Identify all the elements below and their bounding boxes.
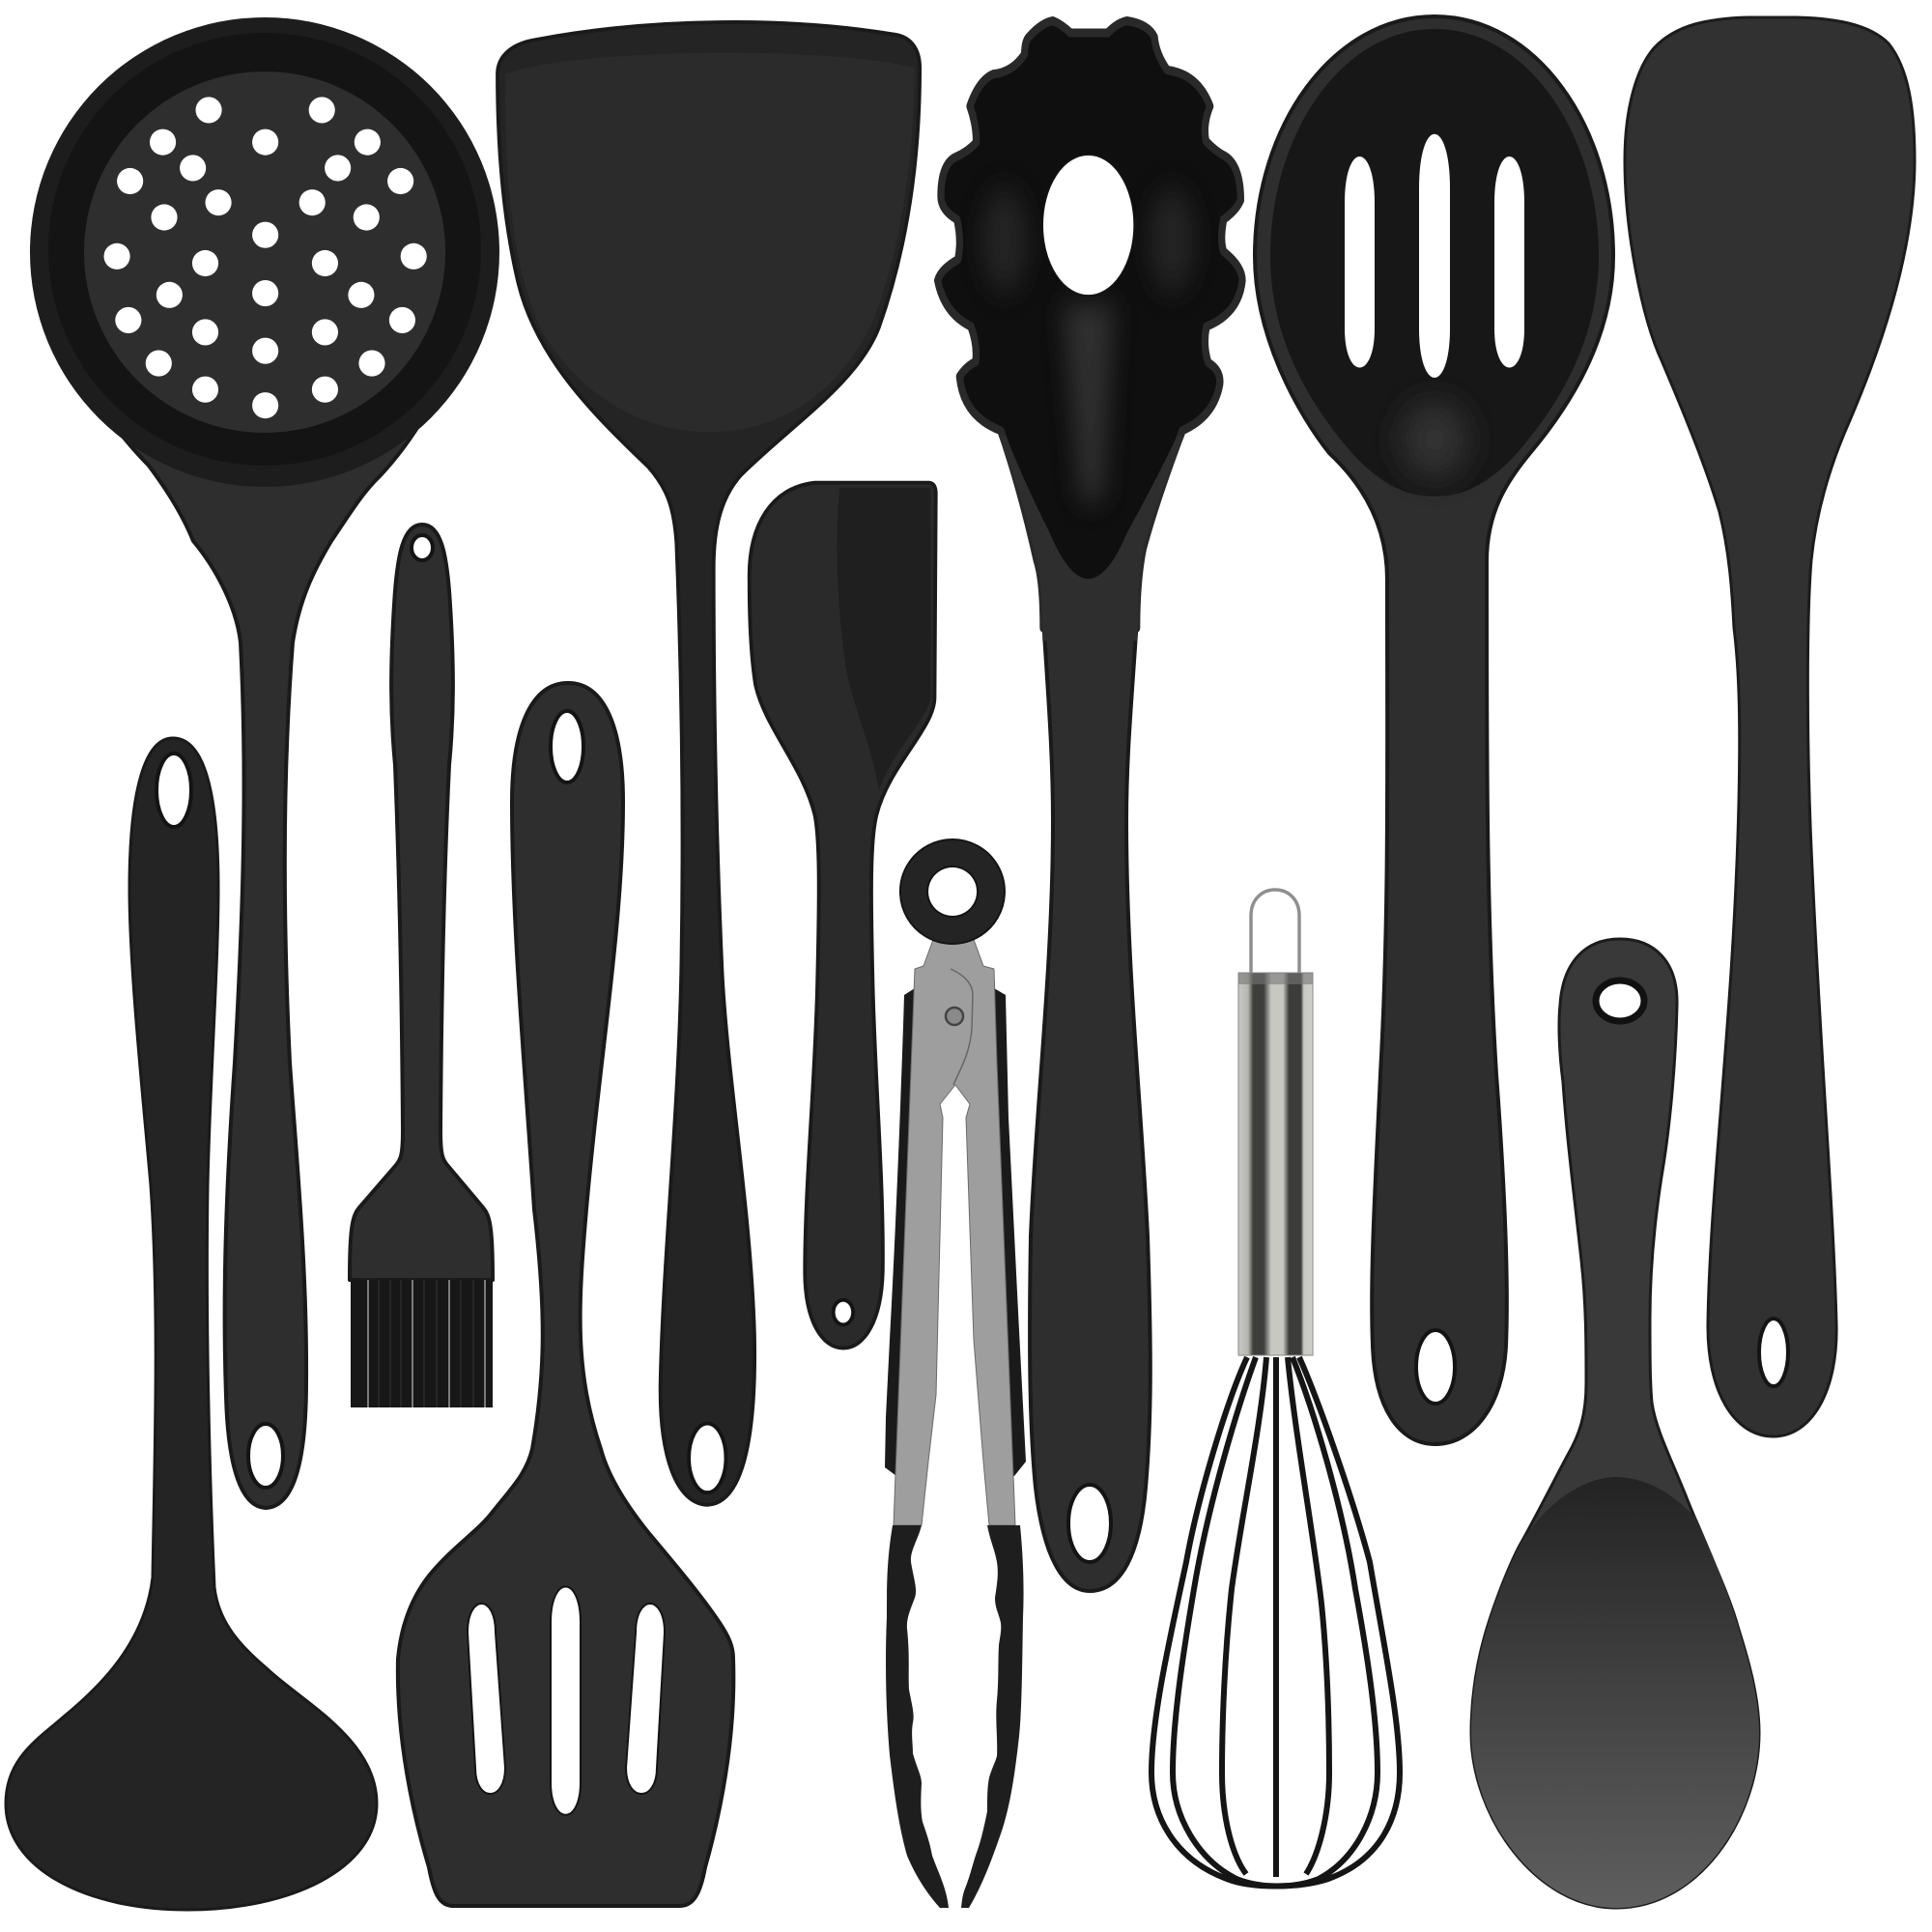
pasta server bottom hole — [1068, 1485, 1111, 1562]
slotted turner — [398, 683, 733, 1906]
flexible spoonula — [1625, 17, 1915, 1436]
skimmer holes — [103, 97, 427, 418]
tongs right tip — [961, 1525, 1024, 1908]
basting brush — [350, 525, 493, 1407]
whisk — [1151, 890, 1400, 1886]
serving spoon — [1471, 939, 1759, 1908]
tongs ring — [900, 839, 1005, 944]
spoon hanging hole — [1596, 980, 1644, 1021]
pasta server handle — [1030, 618, 1151, 1591]
tongs — [885, 839, 1026, 1908]
small spatula — [750, 483, 936, 1349]
spoon bowl — [1471, 1477, 1759, 1908]
pasta server — [938, 21, 1242, 1591]
tongs left sleeve — [885, 988, 927, 1476]
soup ladle — [6, 738, 377, 1910]
whisk handle — [1238, 973, 1313, 1355]
pasta server head — [938, 21, 1242, 640]
slots — [1345, 134, 1524, 378]
tongs right sleeve — [985, 988, 1026, 1476]
tongs metal legs — [894, 937, 1015, 1525]
skimmer — [30, 17, 499, 1508]
tongs pivot — [946, 1008, 963, 1025]
bristles — [351, 1280, 493, 1407]
slotted spoon — [1255, 16, 1613, 1444]
whisk wires — [1151, 1357, 1400, 1886]
tongs left tip — [886, 1525, 949, 1908]
turner slots — [468, 1586, 665, 1815]
wok spatula — [497, 22, 920, 1505]
whisk wire loop — [1251, 890, 1299, 973]
